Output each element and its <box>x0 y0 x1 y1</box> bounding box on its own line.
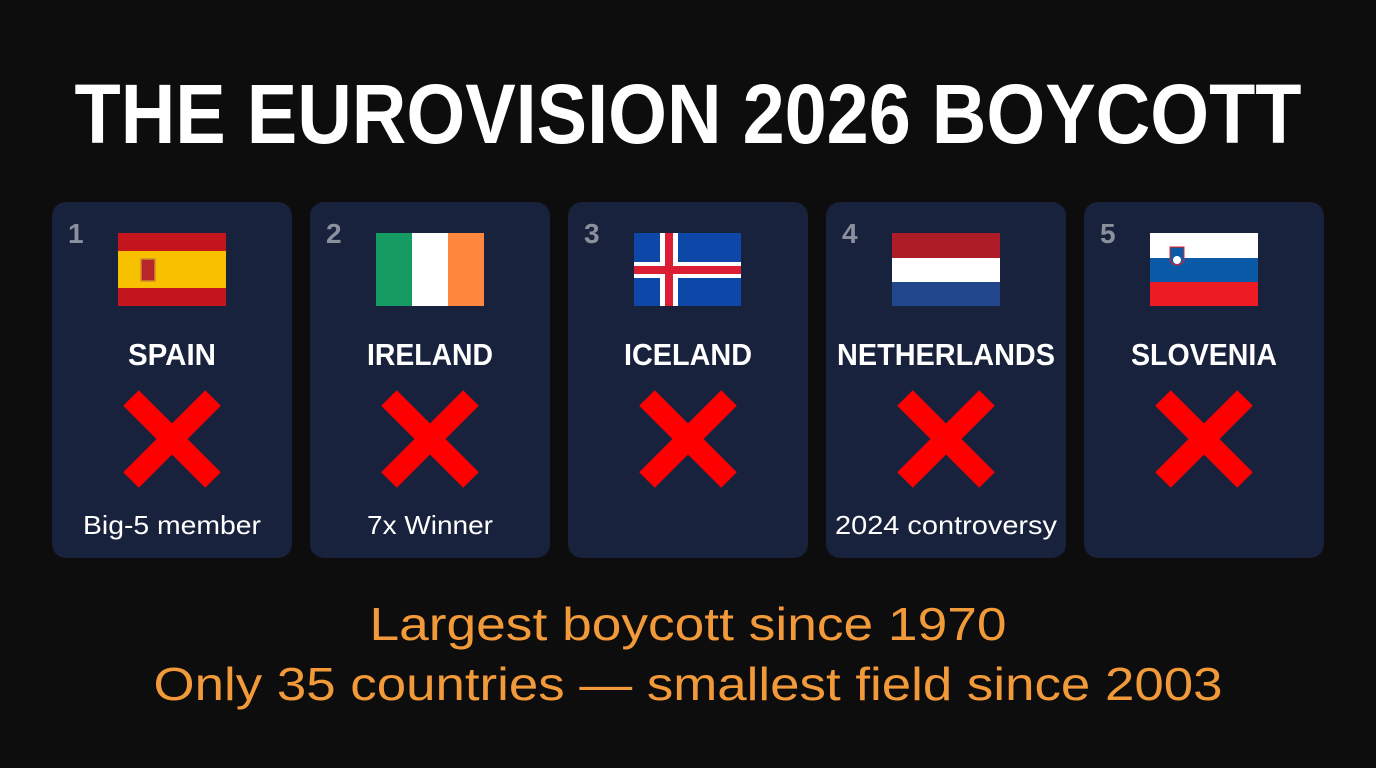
icon: red cross <box>647 398 729 480</box>
panel: netherlands <box>826 202 1066 558</box>
panel: ireland <box>310 202 550 558</box>
icon: red cross <box>389 398 471 480</box>
number 4: 4 <box>842 218 858 249</box>
note: 7x Winner <box>367 510 493 540</box>
panel: slovenia <box>1084 202 1324 558</box>
number 2: 2 <box>326 218 342 249</box>
number 1: 1 <box>68 218 84 249</box>
number 5: 5 <box>1100 218 1116 249</box>
panel: iceland <box>568 202 808 558</box>
icon: red cross <box>905 398 987 480</box>
country name: SPAIN <box>128 337 216 372</box>
note: Big-5 member <box>83 510 261 540</box>
flag: ireland <box>376 233 484 306</box>
country name: IRELAND <box>367 337 493 372</box>
panel: spain <box>52 202 292 558</box>
flag: iceland <box>634 233 741 306</box>
country name: ICELAND <box>624 337 752 372</box>
flag: netherlands <box>892 233 1000 306</box>
country name: NETHERLANDS <box>837 337 1055 372</box>
icon: red cross <box>131 398 213 480</box>
icon: red cross <box>1163 398 1245 480</box>
note: 2024 controversy <box>835 510 1057 540</box>
flag: slovenia <box>1150 233 1258 306</box>
flag: spain <box>118 233 226 306</box>
number 3: 3 <box>584 218 600 249</box>
footer line 2: Only 35 countries — smallest field since 2003 <box>154 658 1222 710</box>
footer line 1: Largest boycott since 1970 <box>370 598 1007 650</box>
country name: SLOVENIA <box>1131 337 1277 372</box>
